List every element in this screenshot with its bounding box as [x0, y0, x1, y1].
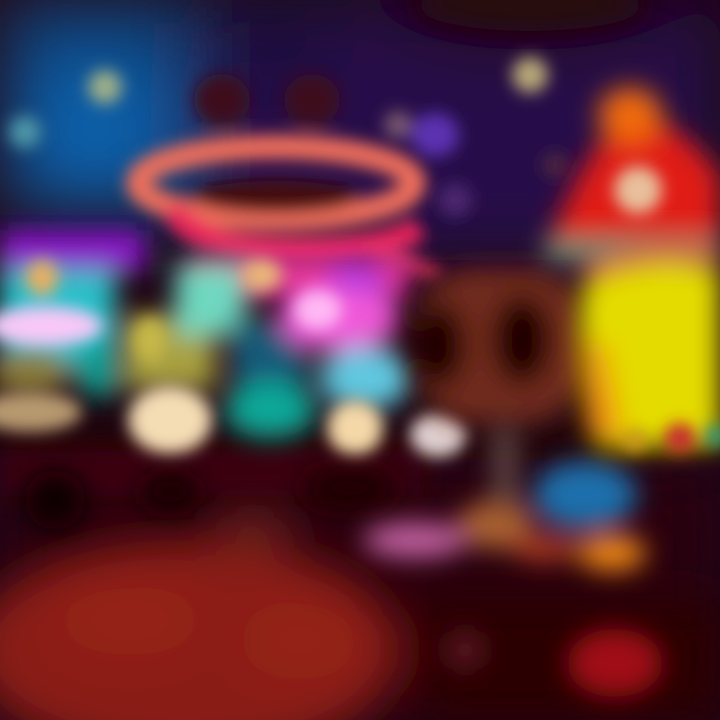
stars [9, 57, 568, 217]
dark red band under machines [0, 450, 420, 495]
mouse-ear character [415, 268, 587, 520]
arcade machines row [0, 230, 411, 438]
top dark canopy [415, 0, 645, 31]
table and prizes [363, 461, 646, 571]
machine highlights [0, 259, 466, 457]
booth highlights [614, 166, 720, 453]
red heart [445, 629, 663, 697]
ceiling ring sign [138, 74, 440, 275]
yellow booth with red roof [545, 87, 720, 450]
dark base under machines [25, 468, 398, 530]
carpet: red floor [0, 501, 720, 720]
